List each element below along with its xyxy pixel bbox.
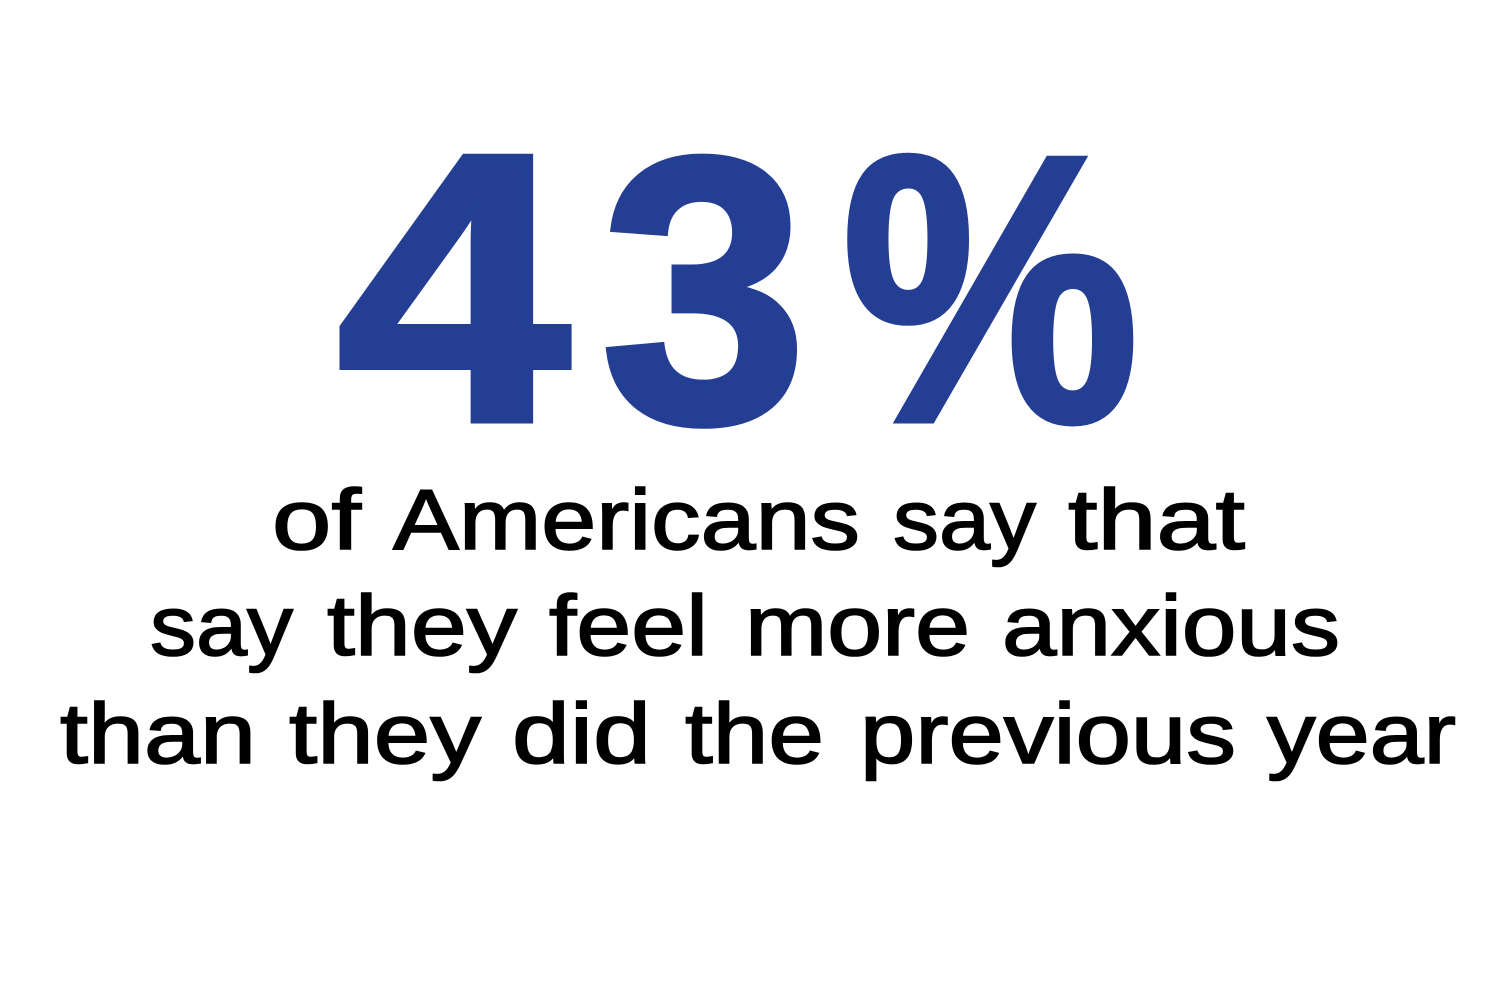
line 3: than — [60, 687, 256, 782]
line 1: say — [893, 473, 1037, 568]
line 1 — [272, 473, 1245, 568]
description text — [60, 473, 1456, 782]
line 1: that — [1068, 473, 1245, 568]
big statistic: 43%: 4 — [337, 74, 573, 501]
line 2 — [150, 579, 1340, 674]
line 3: year — [1267, 687, 1456, 782]
line 2: feel — [549, 579, 708, 674]
line 3: did — [512, 687, 651, 782]
big statistic: 43%: 3 — [601, 80, 807, 502]
line 3: previous — [860, 687, 1236, 782]
line 3 — [60, 687, 1456, 782]
line 2: more — [745, 579, 970, 674]
big statistic: 43% — [337, 74, 1139, 502]
line 1: Americans — [393, 473, 860, 568]
line 3: they — [289, 687, 482, 782]
line 1: of — [272, 473, 361, 568]
line 2: say — [150, 579, 294, 674]
big statistic: 43%: % — [842, 78, 1139, 501]
line 2: they — [327, 579, 518, 674]
line 2: anxious — [1002, 579, 1340, 674]
line 3: the — [685, 687, 824, 782]
